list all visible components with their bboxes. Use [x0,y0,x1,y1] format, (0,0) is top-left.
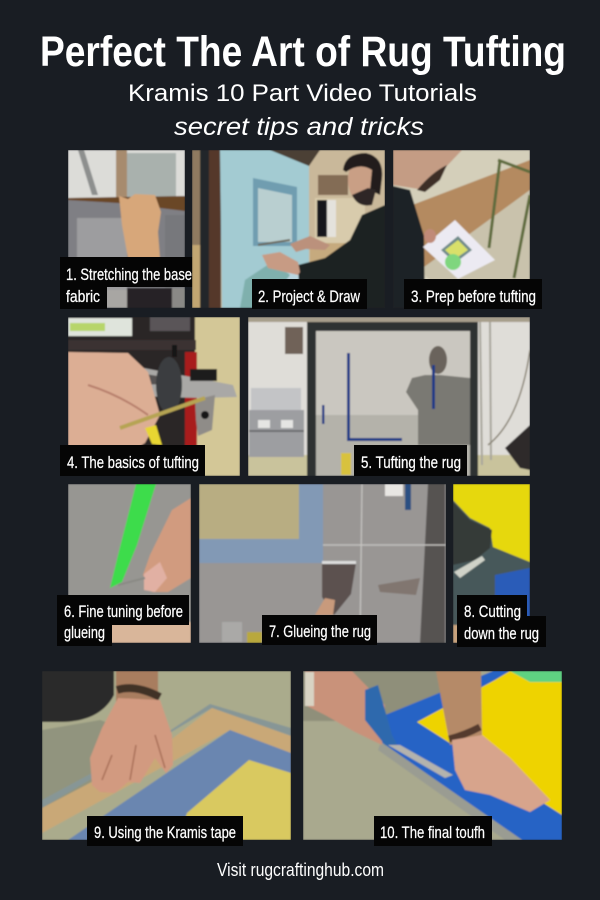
caption: step 10 [374,816,492,846]
subtitle: Kramis 10 Part Video Tutorials [128,80,477,107]
caption: step 1: 1. Stretching the base [66,265,192,284]
caption: step 7: 7. Glueing the rug [269,622,371,641]
photo: scraper spreading glue [199,484,446,643]
panel: step 2 project and draw [192,150,385,309]
panel: step 1 stretching the base fabric [60,150,199,309]
photo: hand pressing tape on rug [42,671,291,840]
caption: step 7 [262,615,377,645]
panel: step 4 the basics of tufting [60,317,240,476]
footer link: Visit rugcraftinghub.com [217,860,384,880]
photo: frame with stretched fabric in workshop [248,317,530,476]
caption: step 4 [60,445,205,476]
caption: step 8: down the rug [464,624,539,643]
caption: step 2 [252,279,367,309]
photo: scissors cutting blue rug edge [303,671,562,840]
panel: step 10 the final touch [303,671,562,846]
photo: man checking paper design [393,150,530,279]
caption: step 6: glueing [64,623,105,642]
panel: step 8 cutting down the rug [453,484,546,647]
caption: step 5: 5. Tufting the rug [361,453,461,472]
caption: step 5 [354,445,467,476]
panel: step 9 using the Kramis tape [42,671,291,846]
caption: step 8: 8. Cutting [464,602,521,621]
photo: hand holding tufting gun [68,317,240,476]
caption: step 4: 4. The basics of tufting [67,453,199,472]
tagline: secret tips and tricks [174,113,424,141]
panel: step 6 fine tuning before glueing [57,484,191,646]
caption: step 10: 10. The final toufh [380,823,485,842]
caption: step 9 [87,816,243,846]
caption: step 3: 3. Prep before tufting [411,287,536,306]
caption: step 1: fabric [66,287,100,306]
photo: trimming green yarn [68,484,191,643]
photo: hand stretching fabric [68,150,185,308]
caption: step 6 [57,595,189,646]
panel: step 5 tufting the rug [248,317,530,476]
panel: step 7 glueing the rug [199,484,446,645]
caption: step 9: 9. Using the Kramis tape [94,823,236,842]
photo: man drawing on projected screen [192,150,385,308]
caption: step 6: 6. Fine tuning before [64,602,183,621]
caption: step 2: 2. Project & Draw [258,287,361,306]
caption: step 3 [404,279,542,309]
caption: step 1 [60,257,199,309]
panel: step 3 prep before tufting [393,150,542,309]
photo: carving tool on yellow rug [453,484,530,643]
caption: step 8 [457,595,546,647]
